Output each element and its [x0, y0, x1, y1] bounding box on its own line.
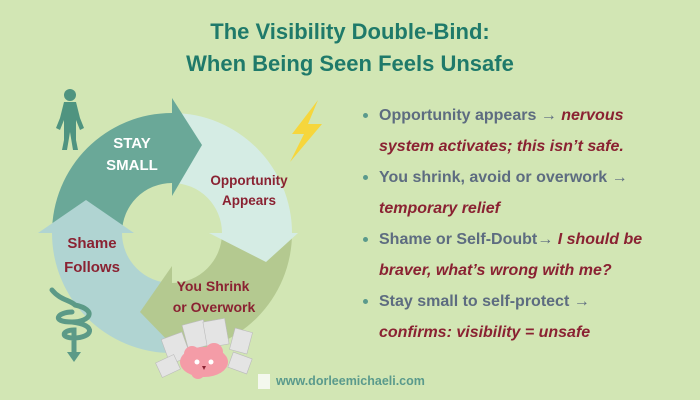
arrow heads [38, 98, 298, 345]
icon: logo [258, 374, 270, 389]
title: The Visibility Double-Bind: [210, 19, 490, 44]
icon: brain with papers [156, 318, 253, 379]
footer url: www.dorleemichaeli.com [276, 374, 425, 388]
icon: spiral arrow [52, 290, 90, 355]
bullet 3: Shame or Self-Doubt→ I should be braver, what’s wrong with me? [379, 231, 642, 279]
label: shame follows: Follows [64, 259, 120, 276]
label: shame follows: Shame [67, 235, 117, 252]
label: you shrink: You Shrink [177, 278, 250, 294]
icon: woman silhouette [56, 89, 84, 150]
bullet 2: You shrink, avoid or overwork → temporary relief [379, 169, 628, 217]
bullet 4: Stay small to self-protect → confirms: visibility = unsafe [379, 293, 590, 341]
label: stay small: SMALL [106, 157, 158, 174]
label: stay small [106, 135, 158, 174]
arrow bodies [52, 113, 292, 353]
label: stay small: STAY [113, 135, 151, 152]
label: you shrink [173, 278, 255, 315]
label: shame follows [64, 235, 120, 276]
bullet 1: Opportunity appears → nervous system activates; this isn’t safe. [379, 107, 624, 155]
label: opportunity appears: Opportunity [210, 173, 288, 188]
title [186, 19, 514, 76]
label: you shrink: or Overwork [173, 299, 255, 315]
label: opportunity appears [210, 173, 288, 208]
label: opportunity appears: Appears [222, 193, 276, 208]
bullet list [363, 107, 642, 341]
icon: lightning [290, 100, 322, 162]
title: When Being Seen Feels Unsafe [186, 51, 514, 76]
